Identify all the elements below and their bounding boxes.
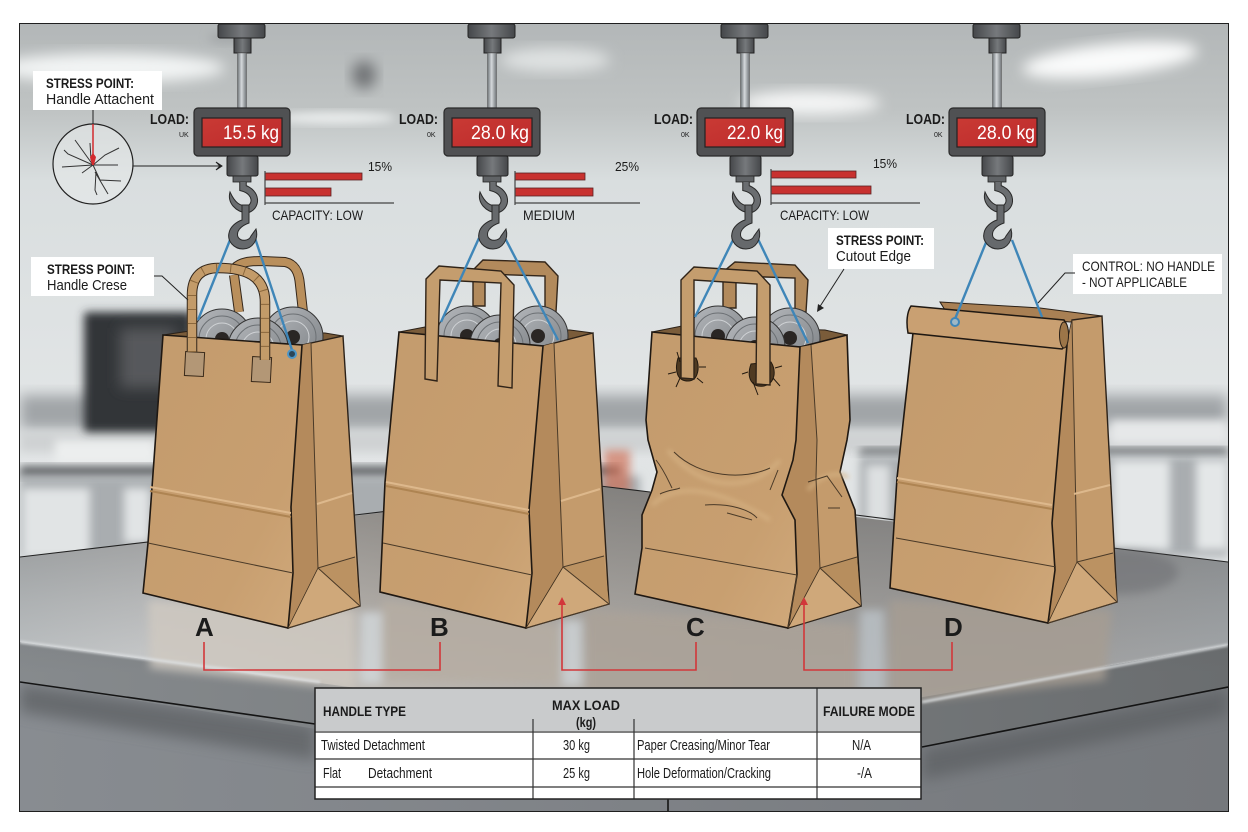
callout: cutout edge stress point: STRESS POINT: [836,232,924,248]
load cell C: 22.0 kg [727,123,783,144]
arrow: to hook collar [133,162,222,170]
table rows: Flat [323,765,342,782]
table rows: N/A [852,737,871,754]
load cell D: 28.0 kg [977,123,1035,144]
bag A: twisted handle [143,238,360,628]
load cell B: LOAD: [399,111,438,128]
table rows [321,737,872,782]
callout: handle crease stress point [31,257,188,300]
callout: control no handle: CONTROL: NO HANDLE [1082,258,1215,274]
table rows: Twisted Detachment [321,737,426,754]
table rows: 25 kg [563,765,590,782]
callout: handle crease stress point: STRESS POINT: [47,261,135,277]
bag B: flat handle [380,238,609,628]
bag letter labels: D [944,612,963,642]
bag letter labels: C [686,612,705,642]
callout: handle attachment stress point [33,71,222,204]
capacity chart B: MEDIUM [523,207,575,223]
load cell C [654,24,793,249]
table rows: Detachment [368,765,433,782]
table lower body [20,680,1228,811]
bag reflections on table [148,600,1112,700]
capacity chart A: 15% [368,159,392,174]
table header: FAILURE MODE [823,703,915,719]
load cell D [906,24,1045,249]
table rows: -/A [857,765,872,782]
table header: HANDLE TYPE [323,703,406,719]
table header [323,697,915,730]
bag C: cutout handle with deformation [635,237,861,628]
load cell B [399,24,540,249]
callout: handle crease stress point: Handle Crese [47,278,127,294]
table front face [20,642,1228,742]
callout: control no handle: - NOT APPLICABLE [1082,274,1187,290]
bag letter labels: B [430,612,449,642]
back counter bands [20,395,1228,429]
bag D: control, no handle [890,240,1117,623]
load cell D: 0K [934,132,943,139]
table rows: Hole Deformation/Cracking [637,765,771,782]
red comparison connectors [204,597,952,670]
table rows: Paper Creasing/Minor Tear [637,737,770,754]
capacity chart B: 25% [615,159,639,174]
table top [20,487,1228,697]
table header: (kg) [576,714,596,730]
load cell C: LOAD: [654,111,693,128]
load cell D: LOAD: [906,111,945,128]
capacity chart A: CAPACITY: LOW [272,207,364,223]
callout: cutout edge stress point [817,228,934,312]
capacity chart C: CAPACITY: LOW [780,207,870,223]
callout: cutout edge stress point: Cutout Edge [836,249,911,265]
capacity chart C: 15% [873,156,897,171]
table rows: 30 kg [563,737,590,754]
load cell A [150,24,290,249]
table header: MAX LOAD [552,697,620,713]
load cell A: LOAD: [150,111,189,128]
load cell A: UK [179,132,189,139]
load cell C: 0K [681,132,690,139]
load cell B: 0K [427,132,436,139]
callout: handle attachment stress point: STRESS POINT: [46,75,134,91]
bag letter labels: A [195,612,214,642]
capacity chart A [265,159,394,223]
callout: handle attachment stress point: Handle Attachent [46,92,154,108]
load cell A: 15.5 kg [223,123,279,144]
load cell B: 28.0 kg [471,123,529,144]
callout: control no handle [1038,254,1222,303]
bag letter labels [195,612,963,642]
icon: cracked detail magnifier [53,124,133,204]
capacity chart C [771,156,920,223]
results table [315,688,921,799]
capacity chart B [515,159,640,223]
